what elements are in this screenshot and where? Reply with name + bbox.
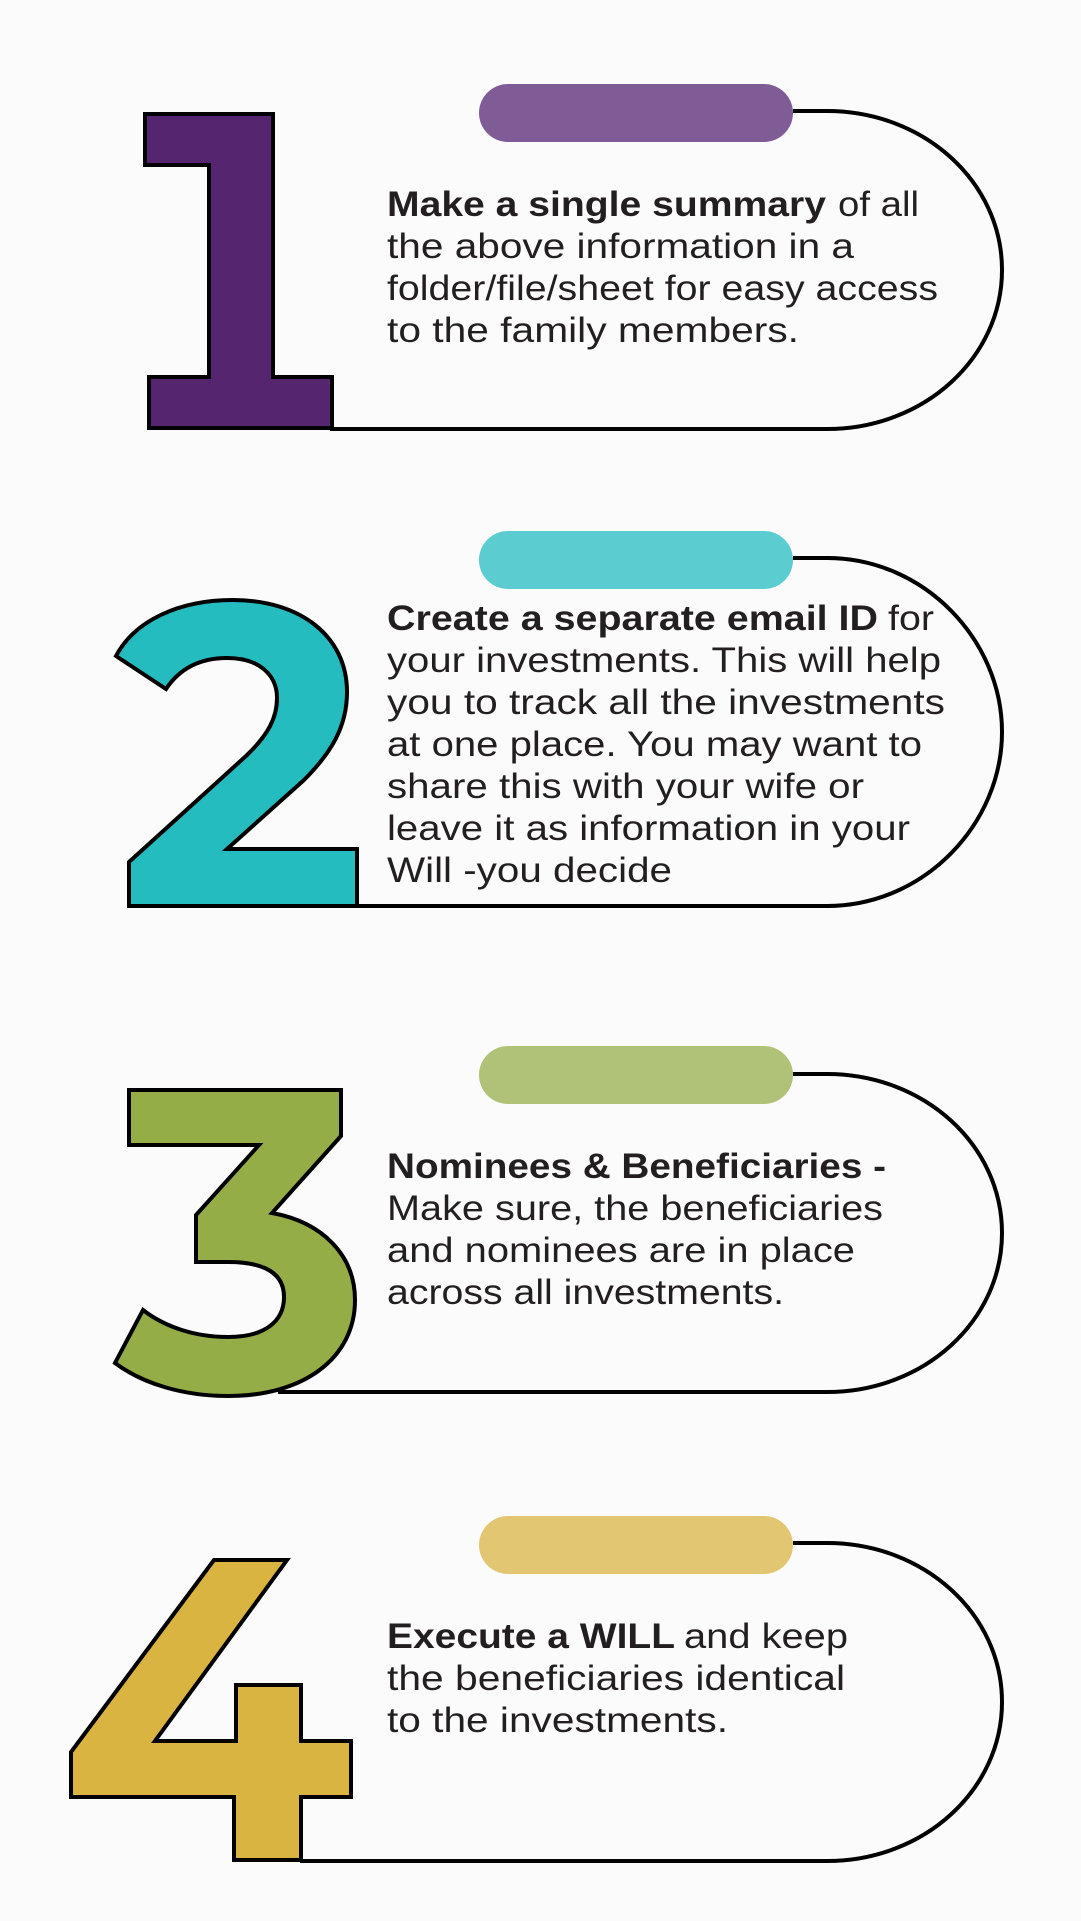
- panel: step 2: [116, 531, 1002, 906]
- text: step 1: folder/file/sheet for easy access: [387, 269, 938, 308]
- text: step 2: share this with your wife or: [387, 767, 864, 806]
- numeral 2: [116, 600, 357, 906]
- text: step 3: Nominees & Beneficiaries -: [387, 1147, 886, 1186]
- text: step 4: Execute a WILL: [387, 1617, 675, 1656]
- text: step 3: and nominees are in place: [387, 1231, 855, 1270]
- text: step 1: of all: [838, 185, 919, 224]
- text: step 2: for: [888, 599, 934, 638]
- text: step 4: [387, 1617, 848, 1740]
- text: step 4: the beneficiaries identical: [387, 1659, 845, 1698]
- text: step 3: across all investments.: [387, 1273, 784, 1312]
- numeral 4: [71, 1560, 351, 1860]
- text: step 3: [387, 1147, 886, 1312]
- text: step 2: at one place. You may want to: [387, 725, 922, 764]
- text: step 1: the above information in a: [387, 227, 855, 266]
- panel: step 1: [145, 84, 1002, 429]
- connector outline 1: [330, 111, 1002, 429]
- text: step 2: Will -you decide: [387, 851, 672, 890]
- text: step 2: your investments. This will help: [387, 641, 941, 680]
- text: step 3: Make sure, the beneficiaries: [387, 1189, 883, 1228]
- connector outline 4: [300, 1543, 1002, 1861]
- connector outline 3: [278, 1074, 1002, 1392]
- panel: step 4: [71, 1516, 1002, 1861]
- numeral 3: [115, 1090, 355, 1396]
- pill 2: [479, 531, 793, 589]
- text: step 1: [387, 185, 938, 350]
- text: step 4: and keep: [684, 1617, 848, 1656]
- text: step 1: Make a single summary: [387, 185, 827, 224]
- connector outline 2: [355, 558, 1002, 906]
- panel: step 3: [115, 1046, 1002, 1396]
- pill 3: [479, 1046, 793, 1104]
- pill 4: [479, 1516, 793, 1574]
- text: step 2: [387, 599, 945, 890]
- text: step 2: leave it as information in your: [387, 809, 910, 848]
- text: step 1: to the family members.: [387, 311, 799, 350]
- text: step 2: you to track all the investments: [387, 683, 945, 722]
- text: step 2: Create a separate email ID: [387, 599, 878, 638]
- pill 1: [479, 84, 793, 142]
- numeral 1: [145, 114, 332, 428]
- text: step 4: to the investments.: [387, 1701, 728, 1740]
